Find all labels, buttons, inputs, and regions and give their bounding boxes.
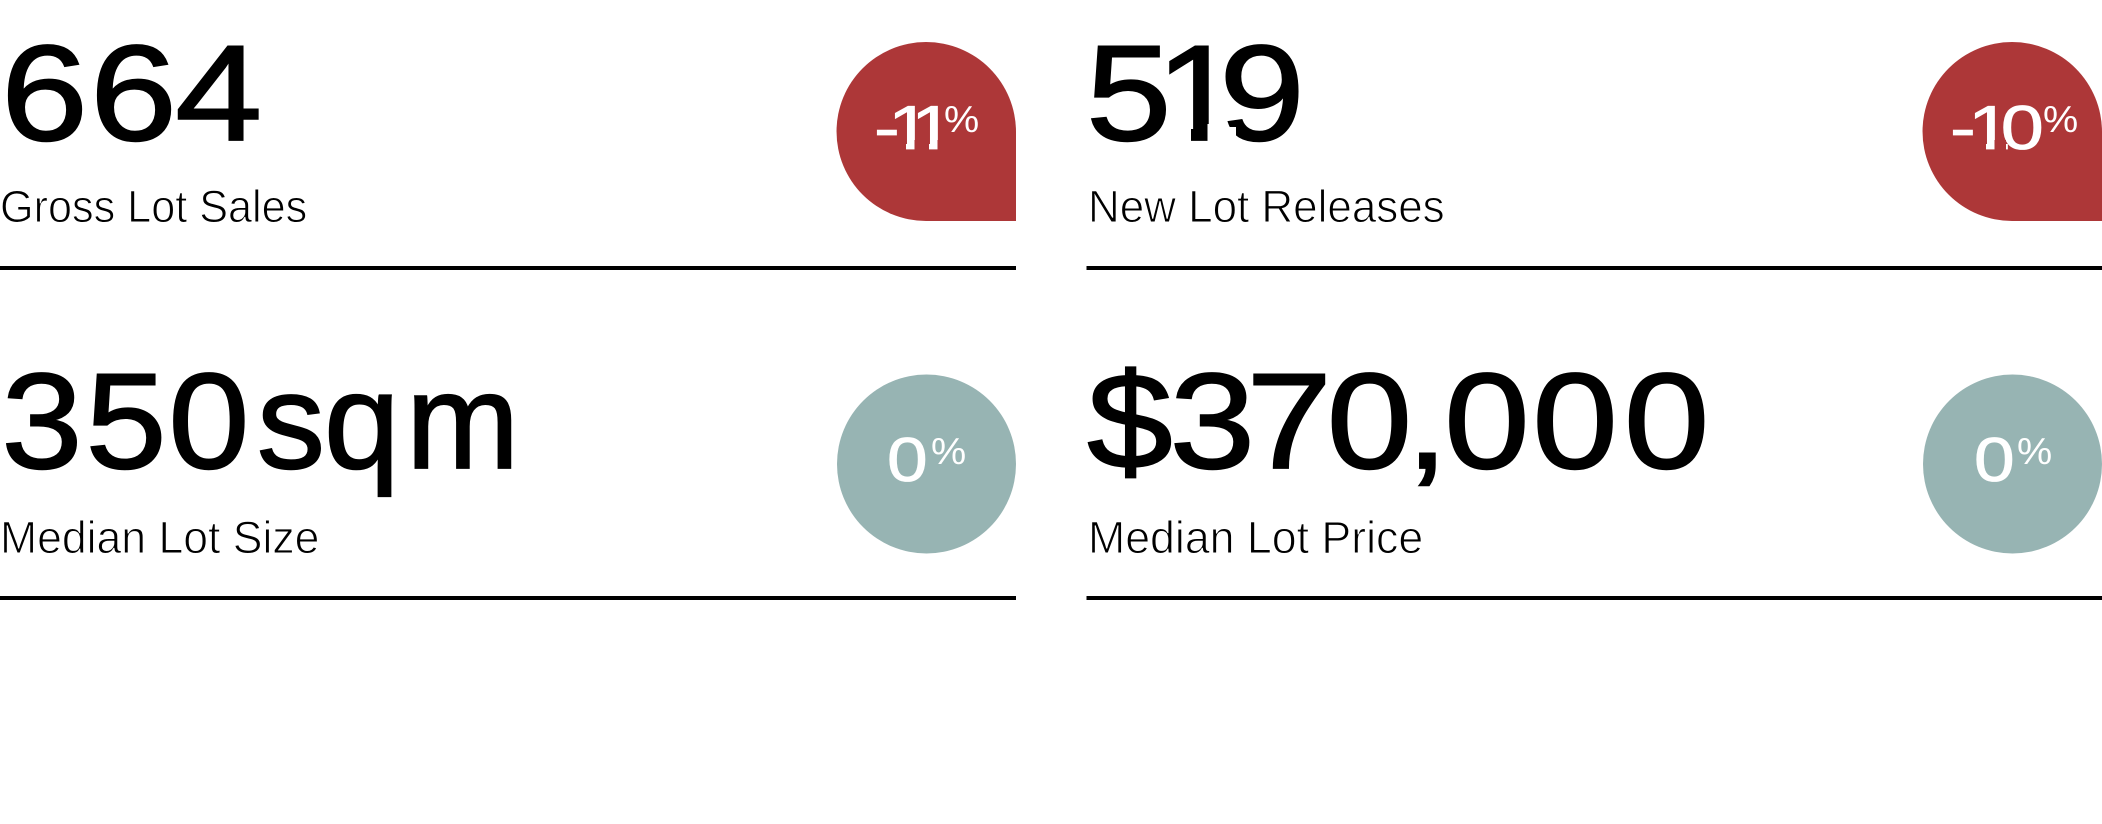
divider bbox=[0, 596, 1016, 600]
badge: minus 10 percent bbox=[1923, 42, 2102, 221]
value: 350sqm: 350 bbox=[2, 345, 249, 497]
badge: 0 percent: 0 bbox=[887, 426, 928, 495]
label: median lot size: Median Lot Size bbox=[0, 513, 319, 563]
badge: minus 11 percent bbox=[837, 42, 1016, 221]
value: $370,000: $370,000 bbox=[1087, 345, 1709, 497]
badge: 0 percent: % bbox=[2017, 431, 2052, 473]
panel: median lot size bbox=[0, 345, 1016, 600]
badge: minus 11 percent: -11 bbox=[874, 92, 954, 162]
panel: gross lot sales bbox=[0, 18, 1016, 270]
badge: 0 percent bbox=[837, 374, 1016, 554]
badge: 0 percent bbox=[1923, 374, 2102, 554]
divider bbox=[1086, 596, 2102, 600]
panel: median lot price bbox=[1086, 345, 2102, 600]
value: 664: 664 bbox=[1, 18, 262, 170]
badge: minus 10 percent: -10 bbox=[1950, 92, 2044, 162]
badge: 0 percent: % bbox=[931, 431, 966, 473]
divider bbox=[1086, 266, 2102, 270]
badge: minus 11 percent: % bbox=[944, 99, 979, 141]
value: 350sqm: sqm bbox=[257, 345, 519, 497]
label: gross lot sales: Gross Lot Sales bbox=[0, 182, 307, 232]
label: median lot price: Median Lot Price bbox=[1088, 512, 1423, 563]
badge: minus 10 percent: % bbox=[2043, 99, 2078, 141]
panel: new lot releases bbox=[1086, 17, 2102, 270]
badge: 0 percent: 0 bbox=[1974, 426, 2015, 495]
value: 519: 519 bbox=[1086, 17, 1305, 169]
value: 350sqm bbox=[2, 345, 519, 497]
divider bbox=[0, 266, 1016, 270]
label: new lot releases: New Lot Releases bbox=[1088, 183, 1445, 232]
